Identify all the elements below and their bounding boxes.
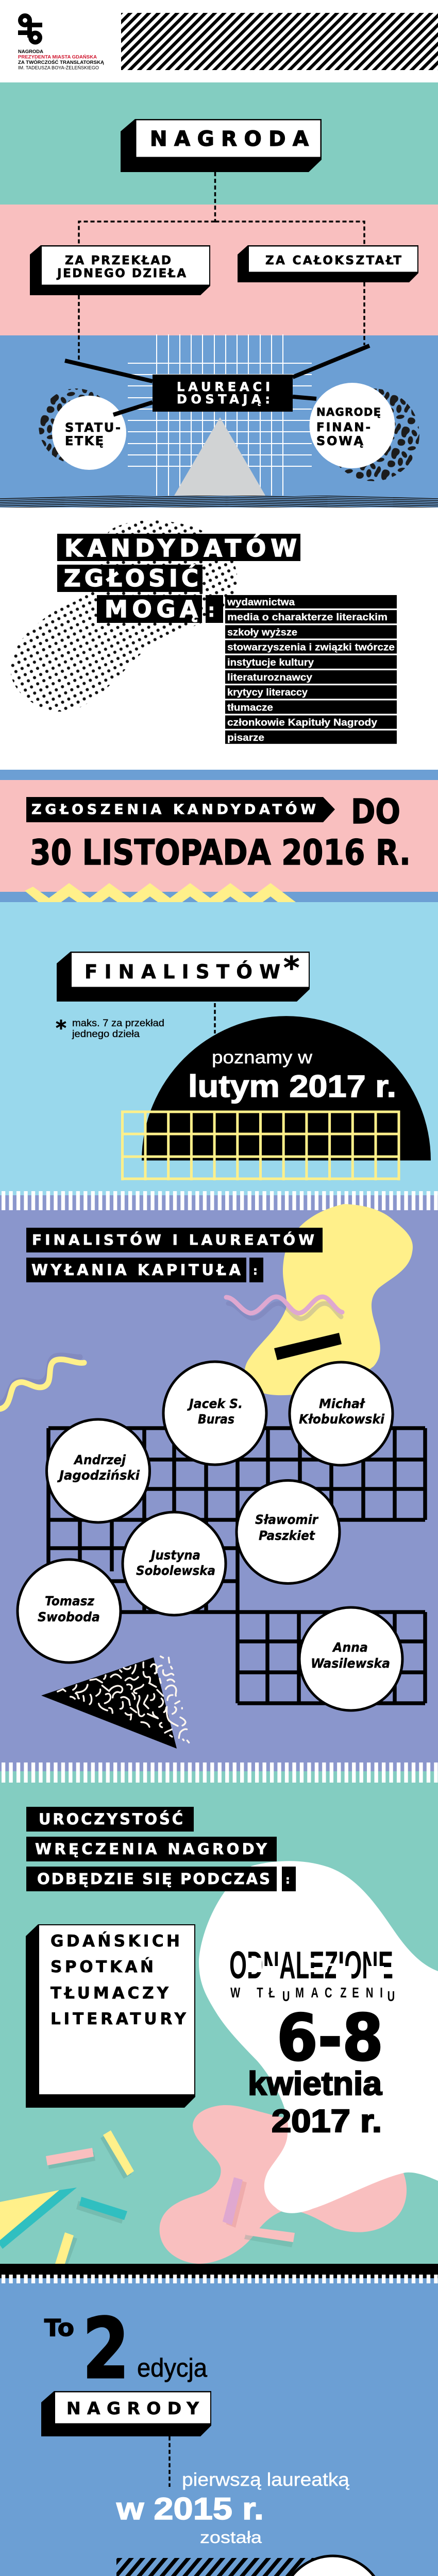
black grid	[48, 1428, 425, 1703]
prize name text: IM. TADEUSZA BOYA-ŻELEŃSKIEGO	[18, 65, 99, 71]
white grid	[128, 334, 312, 496]
heading: mogą: MOGĄ	[105, 596, 198, 623]
note: maks. 7	[56, 1016, 164, 1040]
circle: Anna Wasilewska	[299, 1607, 402, 1710]
box: gdańskich spotkań: GDAŃSKICH	[50, 1932, 180, 1951]
list of eligible nominators: instytucje kultury	[227, 657, 314, 668]
box: laureaci dostają: DOSTAJĄ:	[177, 392, 270, 406]
logo: odnalezione w tłumaczeniu	[229, 1943, 395, 2005]
heading: odbędzie się podczas	[26, 1867, 277, 1891]
circle: Sławomir Paszkiet: Sławomir	[255, 1512, 319, 1527]
dotted blob	[10, 520, 238, 711]
panel: finalists	[0, 902, 438, 1195]
striped band	[121, 13, 438, 70]
circle: nagrodę finansową	[309, 383, 395, 468]
circle: nagrodę finansową: SOWĄ	[316, 434, 363, 448]
logo: odnalezione w tłumaczeniu: W TŁUMACZENIU	[230, 1985, 395, 2005]
circle: nagrodę finansową: NAGRODĘ	[316, 406, 381, 418]
box: gdańskich spotkań: LITERATURY	[50, 2010, 187, 2028]
box: finalistów: FINALISTÓW	[85, 960, 280, 983]
heading: zgłosić: ZGŁOSIĆ	[64, 565, 198, 592]
list of eligible nominators: tłumacze	[227, 702, 273, 713]
confetti	[0, 2130, 295, 2264]
black connector bars	[65, 346, 369, 399]
heading: uroczystość: UROCZYSTOŚĆ	[39, 1810, 183, 1828]
grey triangle	[174, 417, 265, 496]
prize name text: ZA TWÓRCZOŚĆ TRANSLATORSKĄ	[18, 59, 104, 65]
circle: Sławomir Paszkiet: Paszkiet	[259, 1528, 315, 1543]
box: laureaci dostają	[153, 375, 293, 412]
circle: Michał Kłobukowski	[290, 1362, 393, 1465]
box: za przekład: ZA PRZEKŁAD	[65, 254, 171, 267]
note: maks. 7: maks. 7 za przekład	[72, 1018, 164, 1029]
heading: odbędzie się podczas: ODBĘDZIE SIĘ PODCZAS	[37, 1870, 270, 1888]
date: kwietnia: kwietnia	[248, 2065, 382, 2102]
box: nagroda	[121, 119, 322, 172]
prize name text: NAGRODA	[18, 49, 43, 55]
text: lutym 2017 r.: lutym 2017 r.	[188, 1069, 396, 1104]
date: 6-8: 6-8	[277, 2001, 383, 2075]
heading: wręczenia nagrody: WRĘCZENIA NAGRODY	[35, 1840, 267, 1858]
panel: ceremony	[0, 1762, 438, 2264]
box: za przekład: JEDNEGO DZIEŁA	[56, 267, 186, 280]
box: nagroda: NAGRODA	[150, 127, 309, 151]
black slanted bar	[274, 1333, 342, 1360]
text: poznamy w: poznamy w	[212, 1047, 313, 1067]
list of eligible nominators: szkoły wyższe	[227, 627, 297, 638]
colon box: :	[208, 600, 215, 621]
circle: Jacek S. Buras: Jacek S.	[187, 1396, 243, 1411]
striped block	[116, 2558, 315, 2576]
numeral: 2: 2	[82, 2301, 129, 2398]
circle: Justyna Sobolewska: Sobolewska	[136, 1563, 215, 1578]
white blob	[199, 1861, 438, 2213]
circle: Jacek S. Buras	[163, 1362, 266, 1465]
box: laureaci dostają: LAUREACI	[177, 380, 270, 394]
panel: header	[0, 0, 438, 82]
box: gdańskich spotkań	[26, 1924, 195, 2108]
panel: chapter	[0, 1191, 438, 1771]
leopard texture left	[39, 388, 100, 463]
circle: Justyna Sobolewska: Justyna	[148, 1548, 200, 1563]
heading: wyłania kapituła	[26, 1258, 246, 1282]
colon box	[282, 1867, 296, 1891]
box: nagrody	[41, 2391, 211, 2436]
date: 2017 r.: 2017 r.	[272, 2104, 382, 2139]
panel: kandydatów zgłosić mogą	[10, 520, 397, 744]
colon box: :	[253, 1265, 258, 1278]
yellow zigzag	[25, 883, 296, 911]
heading: finalistów i laureatów	[26, 1228, 323, 1252]
circle: Michał Kłobukowski: Kłobukowski	[299, 1412, 384, 1427]
text: pierwszą laureatką: pierwszą laureatką	[182, 2469, 350, 2490]
box: finalistów	[57, 950, 310, 1002]
panel: prize structure	[0, 82, 438, 511]
list of eligible nominators: literaturoznawcy	[227, 672, 312, 683]
circle: Andrzej Jagodziński: Jagodziński	[57, 1468, 140, 1483]
circle: Tomasz Swoboda	[18, 1560, 121, 1663]
circle: Tomasz Swoboda: Swoboda	[38, 1609, 100, 1624]
dashed connector	[169, 2436, 171, 2487]
box: finalistów: *	[283, 950, 299, 986]
note: maks. 7: jednego dzieła	[72, 1029, 140, 1040]
circle: statuetkę: STATU-	[65, 420, 121, 435]
list of eligible nominators	[225, 595, 397, 744]
panel: deadline	[0, 770, 438, 911]
leopard texture right	[339, 388, 419, 481]
yellow wiggle	[0, 1355, 84, 1409]
colon box	[249, 1258, 263, 1282]
colon box	[206, 595, 223, 623]
heading: wręczenia nagrody	[26, 1837, 277, 1861]
dashed connector	[214, 1003, 216, 1033]
pink blob	[160, 2105, 407, 2264]
text: edycja: edycja	[137, 2353, 207, 2382]
yellow grid	[123, 1111, 399, 1180]
panel: second edition	[0, 2275, 438, 2576]
circle: statuetkę: ETKĘ	[65, 434, 104, 448]
circle: Sławomir Paszkiet	[237, 1481, 340, 1584]
list of eligible nominators: wydawnictwa	[227, 597, 295, 608]
black triangle with squiggles	[41, 1656, 189, 1749]
black semicircle	[142, 1016, 431, 1160]
circle: Maryna Ochab	[281, 2556, 384, 2576]
heading: finalistów i laureatów: FINALISTÓW I LAUREATÓW	[32, 1231, 314, 1248]
white ticks	[0, 2275, 438, 2283]
note: maks. 7: *	[56, 1016, 66, 1040]
prize name text: PREZYDENTA MIASTA GDAŃSKA	[18, 55, 97, 60]
icon: prize logo	[18, 15, 42, 42]
box: za całokształt: ZA CAŁOKSZTAŁT	[265, 254, 401, 267]
pink wiggle	[226, 1297, 342, 1319]
list of eligible nominators: media o charakterze literackim	[227, 612, 388, 623]
circle: nagrodę finansową: FINAN-	[316, 421, 370, 434]
box: gdańskich spotkań: SPOTKAŃ	[50, 1958, 154, 1976]
text: w 2015 r.: w 2015 r.	[116, 2492, 264, 2526]
list of eligible nominators: pisarze	[227, 733, 264, 743]
yellow blob	[245, 1204, 413, 1395]
box: gdańskich spotkań: TŁUMACZY	[50, 1984, 169, 2003]
white ticks	[0, 1762, 438, 1783]
wavy black stripes	[0, 496, 438, 507]
box: za całokształt	[238, 245, 418, 282]
text: została: została	[200, 2528, 262, 2547]
list of eligible nominators: członkowie Kapituły Nagrody	[227, 718, 377, 728]
arrow label: zgłoszenia kandydatów	[26, 797, 335, 822]
circle: Justyna Sobolewska	[123, 1512, 226, 1615]
circle: Jacek S. Buras: Buras	[198, 1412, 234, 1427]
circle: Tomasz Swoboda: Tomasz	[45, 1594, 94, 1608]
text: to: To	[44, 2314, 74, 2342]
arrow label: zgłoszenia kandydatów: ZGŁOSZENIA KANDYDATÓW	[31, 801, 316, 818]
white ticks	[0, 1191, 438, 1210]
dashed connectors	[79, 172, 364, 363]
text: do: DO	[351, 792, 400, 832]
circle: Anna Wasilewska: Wasilewska	[311, 1656, 390, 1671]
heading: kandydatów: KANDYDATÓW	[64, 534, 297, 562]
box: nagrody: NAGRODY	[66, 2398, 199, 2418]
circle: Andrzej Jagodziński	[46, 1419, 149, 1522]
circle: statuetkę	[52, 396, 153, 470]
heading: uroczystość	[26, 1807, 194, 1832]
divider: black strip with ticks	[0, 2264, 438, 2278]
list of eligible nominators: stowarzyszenia i związki twórcze	[227, 642, 395, 653]
list of eligible nominators: krytycy literaccy	[227, 687, 308, 698]
circle: Anna Wasilewska: Anna	[332, 1640, 368, 1655]
prize name text	[18, 49, 104, 71]
circle: Michał Kłobukowski: Michał	[319, 1396, 365, 1411]
box: za przekład	[30, 245, 210, 295]
colon box: :	[285, 1874, 290, 1887]
circle: Andrzej Jagodziński: Andrzej	[73, 1452, 126, 1467]
heading: wyłania kapituła: WYŁANIA KAPITUŁA	[31, 1261, 241, 1279]
